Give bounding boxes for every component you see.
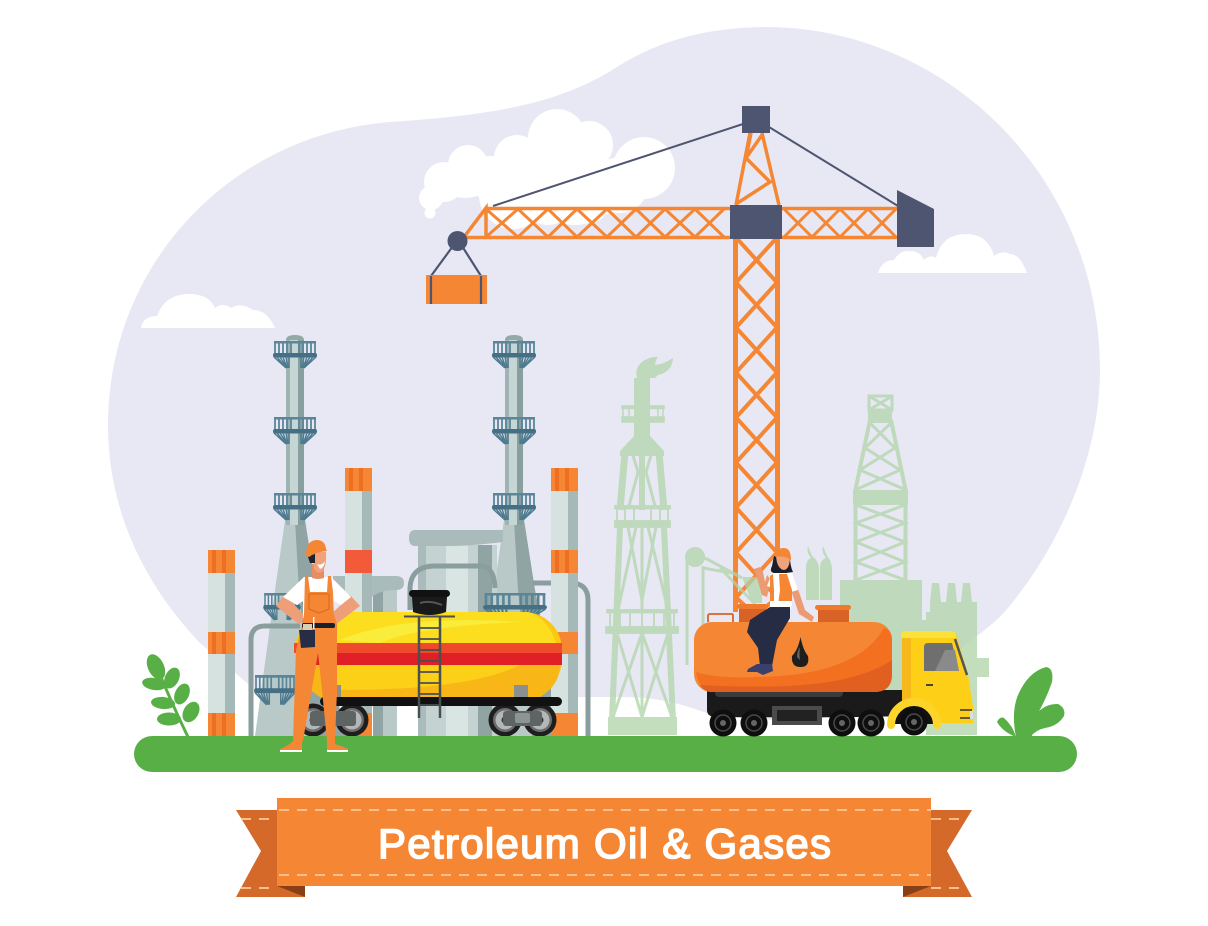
secondary column — [333, 576, 404, 736]
ladder — [404, 616, 455, 718]
stitching — [241, 810, 967, 888]
shirt — [283, 577, 351, 618]
truck wheel arch — [890, 700, 938, 724]
neck and head — [312, 564, 324, 579]
truck dark bar — [715, 689, 843, 697]
tank domes — [708, 604, 851, 622]
tanker truck — [694, 548, 973, 736]
truck wheels — [710, 708, 928, 736]
shoes — [280, 741, 302, 752]
worker man in overalls — [276, 540, 360, 752]
truck cab — [901, 631, 973, 723]
refinery tower left — [255, 335, 345, 736]
helmet — [775, 548, 791, 560]
ground strip — [134, 736, 1077, 772]
plant right — [997, 667, 1064, 737]
plant left — [141, 651, 203, 737]
ribbon folds — [277, 886, 931, 897]
shirt and vest — [767, 573, 798, 609]
ribbon front — [277, 798, 931, 886]
belt — [302, 623, 335, 628]
pipes — [251, 566, 588, 736]
truck fender — [891, 702, 937, 725]
crane cables — [493, 124, 898, 206]
striped chimney B — [345, 468, 372, 736]
axle blocks — [337, 685, 528, 697]
background blob — [108, 27, 1100, 720]
ribbon left tail — [236, 810, 305, 897]
refinery silhouette — [926, 583, 989, 735]
wagon beam — [320, 697, 562, 706]
hook and load — [426, 231, 487, 304]
ribbon right tail — [903, 810, 972, 897]
crane mast lattice — [736, 238, 778, 612]
orange tank — [694, 622, 892, 692]
central column — [409, 530, 503, 736]
striped chimney A — [208, 550, 235, 736]
refinery tower right — [474, 335, 564, 736]
legs — [747, 607, 790, 666]
tower crane — [426, 106, 934, 612]
cloud: large smoke cloud — [419, 109, 675, 229]
truck chassis — [707, 690, 902, 717]
right arm — [791, 589, 814, 622]
truck box — [772, 706, 822, 725]
lower platforms — [254, 593, 547, 705]
tank body — [295, 612, 562, 697]
striped chimney C — [551, 468, 578, 736]
drilling rig derrick — [840, 396, 922, 640]
left arm — [276, 595, 305, 625]
title ribbon — [236, 798, 972, 897]
counterweight — [897, 190, 934, 247]
pumpjack — [685, 547, 762, 665]
background green oil field silhouettes — [606, 357, 989, 735]
worker woman — [747, 548, 814, 675]
raised arm — [754, 567, 771, 597]
red stripe — [294, 643, 562, 653]
hard hat — [306, 540, 327, 557]
tool pouch — [299, 630, 315, 648]
face — [776, 556, 790, 570]
crane top block — [742, 106, 770, 133]
crane boom lattice — [463, 208, 898, 238]
shoes — [747, 664, 773, 675]
ribbon title text: Petroleum Oil & Gases — [378, 820, 831, 867]
small tanks — [806, 546, 832, 600]
hair — [771, 556, 793, 573]
crane central block — [730, 205, 782, 239]
rail tank wagon — [294, 590, 562, 736]
oil drop icon — [792, 637, 808, 667]
cloud: right small — [878, 234, 1027, 273]
hatch — [409, 590, 450, 615]
overalls — [293, 576, 337, 741]
gas flare derrick — [606, 357, 678, 735]
cloud: left small — [141, 294, 275, 328]
wagon wheels — [296, 704, 556, 736]
right arm — [329, 595, 360, 625]
crane top section — [736, 133, 779, 205]
